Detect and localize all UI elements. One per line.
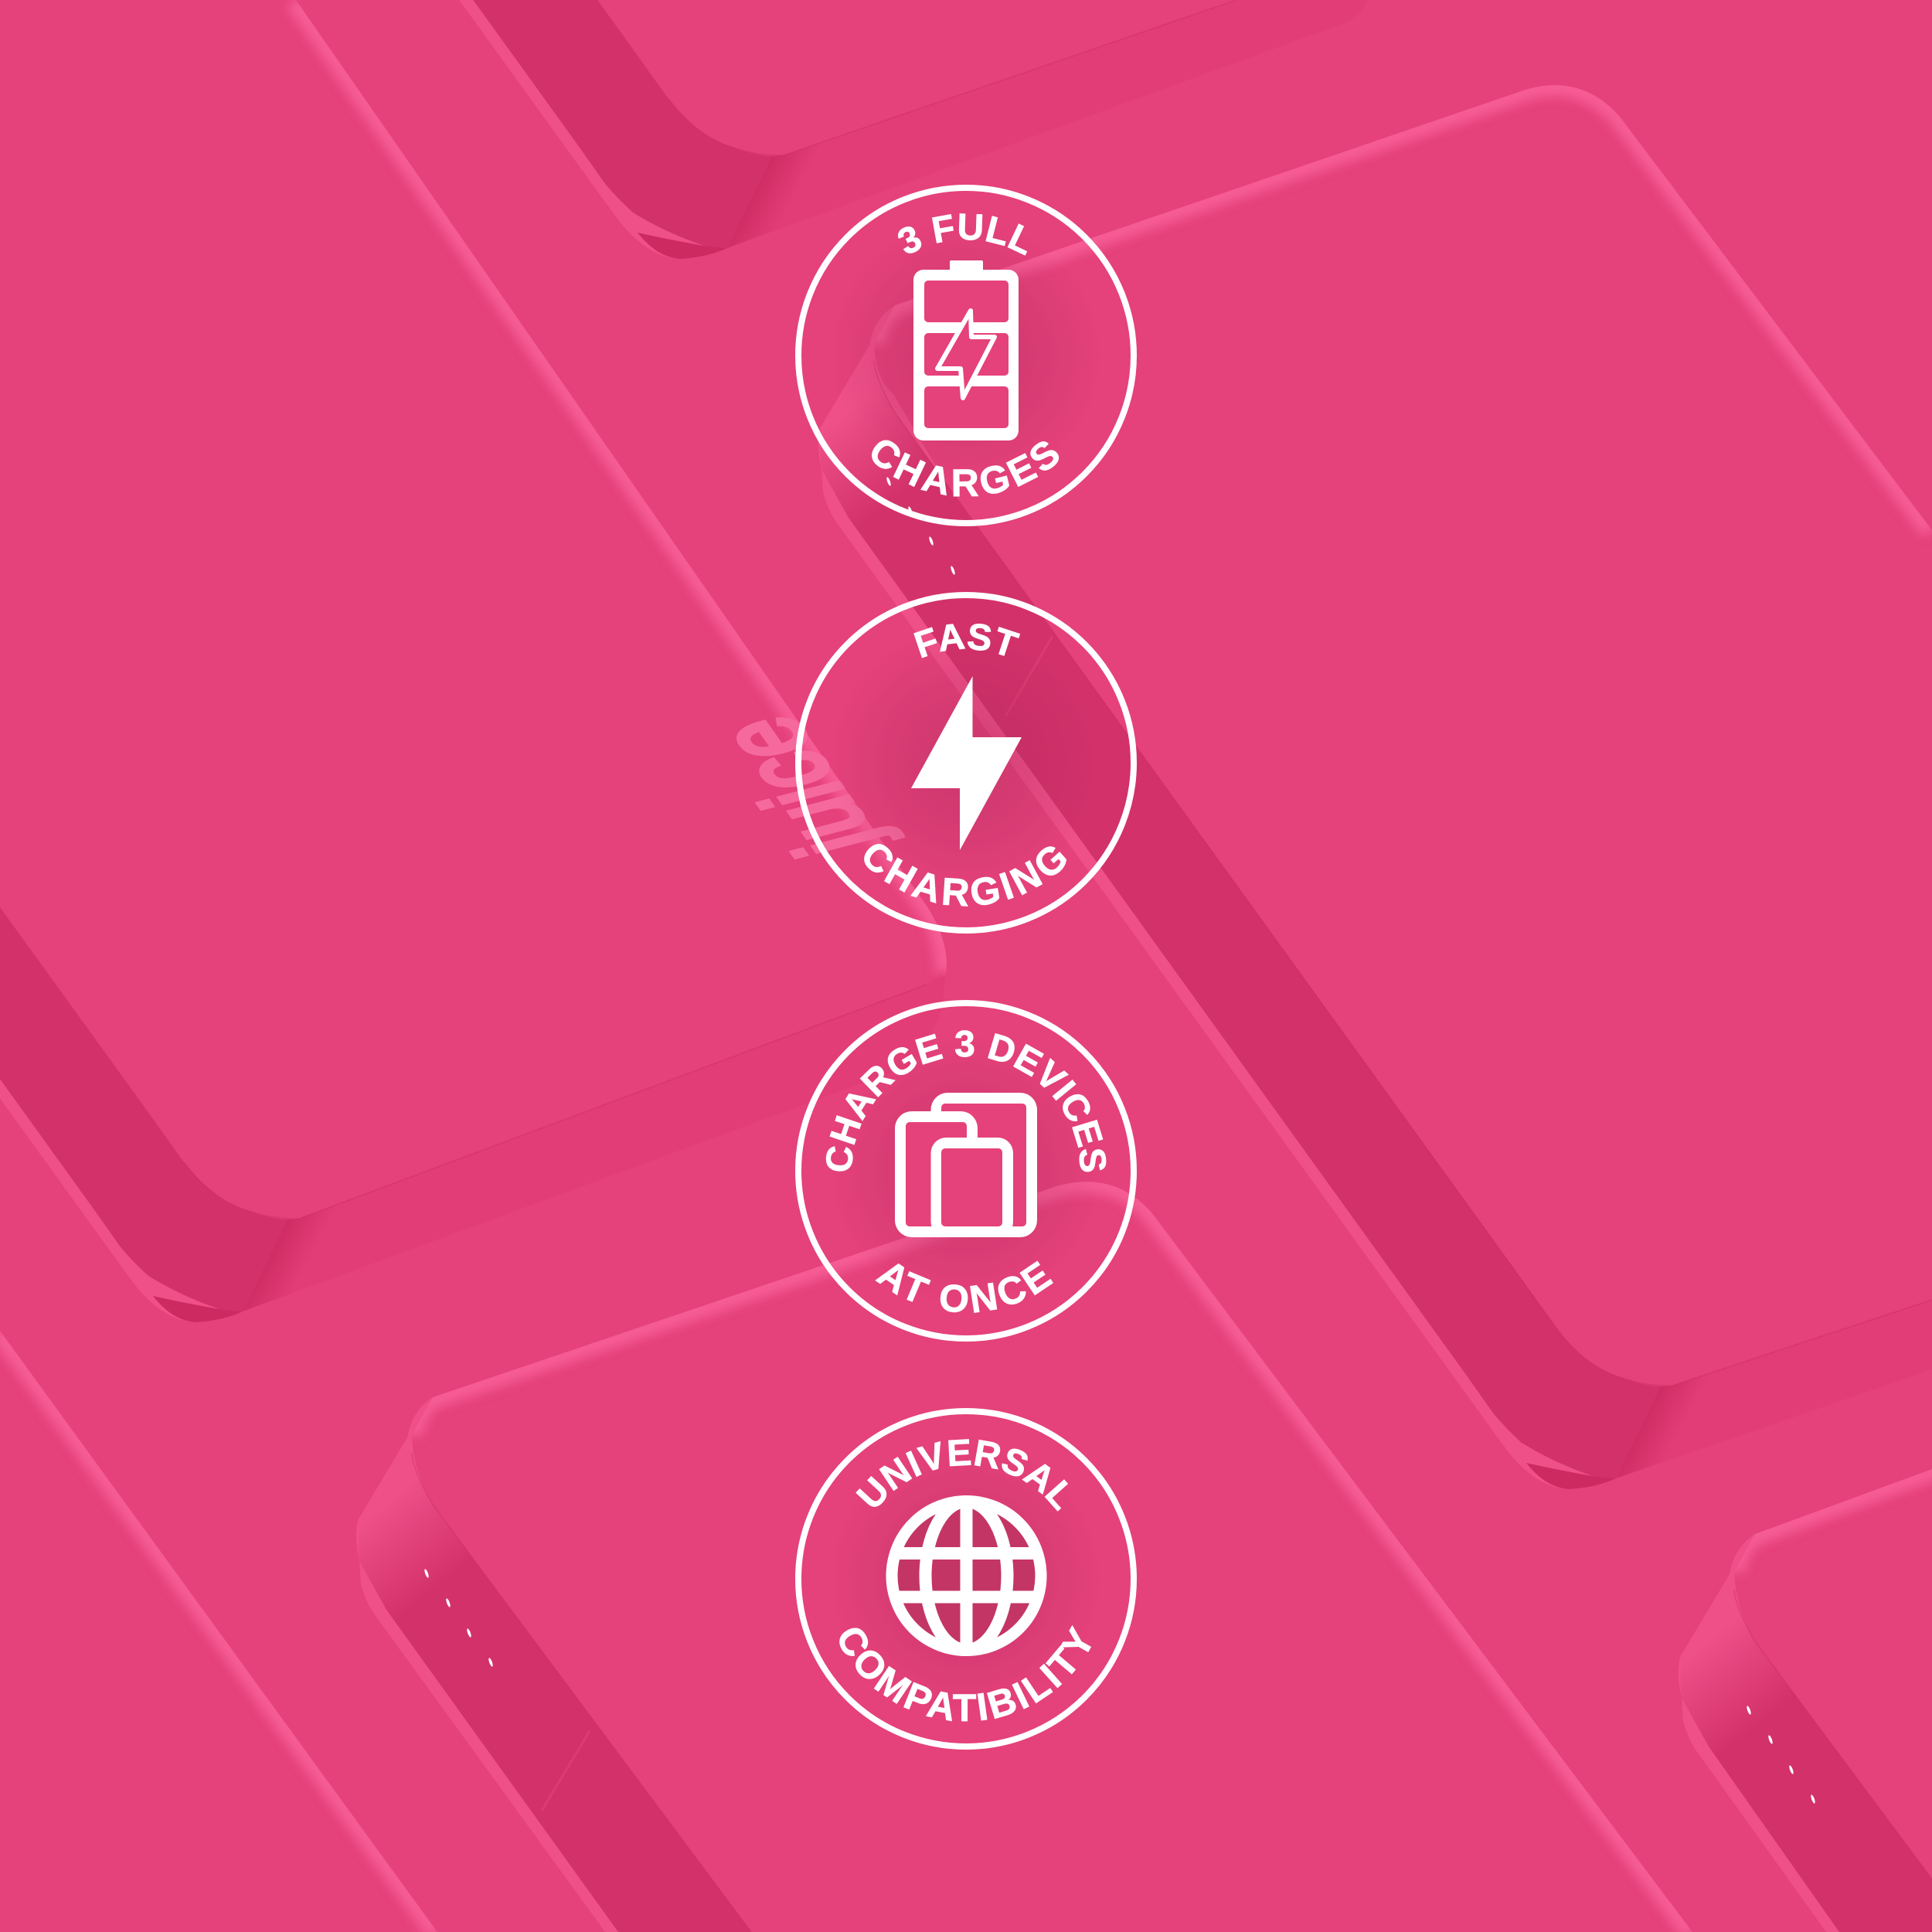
badge text: CHARGES: CHARGES (872, 440, 1059, 496)
badge text: CHARGE 3 DEVICES: CHARGE 3 DEVICES (825, 1030, 1107, 1172)
badge text: CHARGING: CHARGING (864, 844, 1066, 906)
power bank: upper left (0, 246, 947, 1322)
badge text: 3 FULL: 3 FULL (898, 213, 1028, 256)
power bank: bottom right (1679, 1466, 1932, 1932)
power bank: top centre (0, 0, 1368, 259)
power bank: right (818, 85, 1932, 1489)
power bank: lower-left edge (0, 1331, 437, 1932)
badge: fast charging (795, 592, 1137, 934)
power bank: bottom centre (356, 1182, 1692, 1932)
indicator dots: bottom centre bank (423, 1569, 494, 1667)
icon: battery (913, 260, 1019, 440)
logo: juice: juice (690, 706, 903, 869)
badge text: FAST: FAST (913, 624, 1020, 658)
badge: charge 3 devices at once (795, 1000, 1137, 1342)
badge text: COMPATIBILITY: COMPATIBILITY (839, 1625, 1091, 1722)
icon: lightning bolt (911, 676, 1022, 850)
icon: three devices (895, 1093, 1037, 1237)
badge: 3 full charges (795, 185, 1137, 526)
badge text: AT ONCE: AT ONCE (875, 1260, 1053, 1313)
icon: globe (892, 1499, 1041, 1652)
badge: universal compatibility (795, 1408, 1137, 1750)
badge text: UNIVERSAL: UNIVERSAL (855, 1439, 1068, 1512)
indicator dots: right bank (886, 477, 956, 575)
